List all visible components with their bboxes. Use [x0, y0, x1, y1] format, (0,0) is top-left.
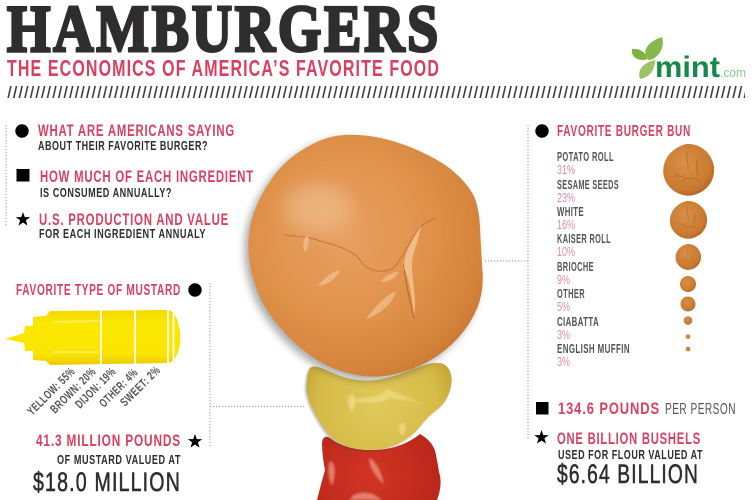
icon: star	[534, 430, 549, 444]
legend text: production: FOR EACH INGREDIENT ANNUALY	[39, 226, 206, 241]
legend text: consumed: IS CONSUMED ANNUALLY?	[40, 185, 172, 200]
chart labels: BROWN: 20%	[47, 365, 99, 416]
bun list: BRIOCHE	[557, 260, 594, 274]
flour value: $6.64 BILLION	[557, 459, 699, 489]
icon: circle	[15, 124, 29, 138]
legend text: saying: ABOUT THEIR FAVORITE BURGER?	[38, 138, 208, 153]
bun list: POTATO ROLL	[557, 150, 614, 164]
chart labels	[24, 363, 163, 418]
logo wordmark: mint	[655, 51, 720, 84]
chart labels: OTHER: 4%	[96, 366, 141, 410]
panel: legend	[6, 121, 254, 241]
icon: mint leaves	[632, 37, 663, 79]
bun list: 3%	[557, 355, 570, 369]
ketchup	[317, 434, 441, 500]
chart labels: YELLOW: 55%	[24, 364, 78, 418]
chart labels: SWEET: 2%	[117, 363, 163, 409]
consumption stat: 134.6 POUNDS	[558, 399, 660, 418]
bun list: WHITE	[557, 205, 584, 219]
icon: square	[536, 402, 548, 414]
legend heading: production: U.S. PRODUCTION AND VALUE	[39, 210, 229, 229]
bun list: SESAME SEEDS	[557, 178, 619, 192]
chart: bun size bubbles	[663, 144, 714, 351]
bun creases	[285, 218, 435, 319]
logo: mint.com	[632, 37, 746, 84]
subtitle: THE ECONOMICS OF AMERICA’S FAVORITE FOOD	[7, 55, 440, 81]
mustard production heading: 41.3 MILLION POUNDS	[36, 431, 181, 450]
bun highlight	[284, 184, 352, 232]
chart: mustard bottle	[5, 310, 180, 365]
bun list: 16%	[557, 218, 575, 232]
legend heading: consumed: HOW MUCH OF EACH INGREDIENT	[40, 167, 254, 186]
bun list: KAISER ROLL	[557, 232, 611, 246]
bun list: ENGLISH MUFFIN	[557, 342, 630, 356]
hatched divider	[7, 86, 745, 98]
bun list: CIABATTA	[557, 315, 599, 329]
bun list: 9%	[557, 273, 570, 287]
bun list	[557, 150, 630, 369]
panel: favorite mustard	[5, 282, 210, 497]
bun list: 10%	[557, 245, 575, 259]
bun shadow	[244, 139, 479, 381]
main bun	[248, 135, 483, 377]
heading: favorite type of mustard: FAVORITE TYPE OF MUSTARD	[16, 282, 181, 299]
icon: circle	[188, 283, 202, 297]
icon: circle	[535, 124, 549, 138]
bun list: 31%	[557, 163, 575, 177]
bun list: OTHER	[557, 287, 585, 301]
bun list: 5%	[557, 300, 570, 314]
mustard value: $18.0 MILLION	[33, 467, 181, 497]
bun list: 3%	[557, 328, 570, 342]
logo domain: .com	[720, 66, 746, 80]
mustard production text: OF MUSTARD VALUED AT	[57, 452, 181, 467]
icon: square	[16, 169, 30, 182]
panel: burger stack	[210, 135, 528, 500]
panel: favorite bun	[528, 123, 736, 489]
icon: star	[16, 212, 30, 226]
icon: star	[188, 434, 202, 448]
legend heading: saying: WHAT ARE AMERICANS SAYING	[38, 121, 235, 140]
bun list: 23%	[557, 191, 575, 205]
mustard	[305, 363, 452, 452]
chart labels: DIJON: 19%	[72, 364, 119, 411]
